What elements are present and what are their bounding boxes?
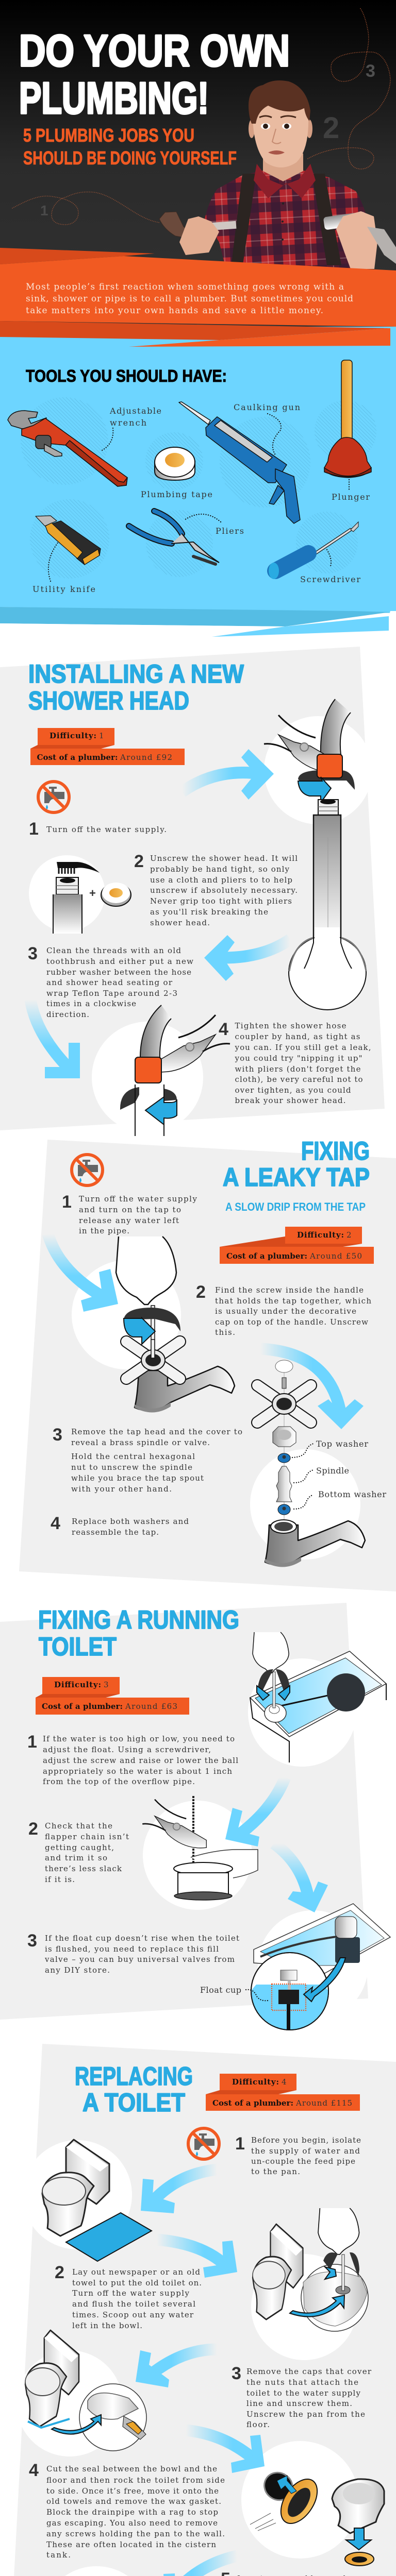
step 4: break your shower head. — [235, 1096, 345, 1105]
step 2: Check that the — [45, 1821, 112, 1831]
illustration: wax ring and bowl — [250, 2467, 384, 2566]
title: PLUMBING! — [19, 74, 209, 123]
step 1: un-couple the feed pipe — [251, 2157, 355, 2166]
step 2: probably be hand tight, so only — [150, 865, 290, 874]
step 4: tank. — [46, 2550, 71, 2560]
step 3: times in a clockwise — [46, 999, 136, 1008]
step 3: toilet to the water supply — [246, 2388, 361, 2398]
step 1 — [29, 819, 167, 839]
step 2 — [55, 2263, 202, 2330]
step 4: cloth), be very careful not to — [235, 1075, 363, 1084]
step 2: that holds the tap together, which — [215, 1296, 371, 1306]
illustration: hand with screwdriver on tap — [116, 1236, 235, 1413]
exploded tap labels: Spindle — [316, 1466, 349, 1476]
step 3: and shower head seating or — [46, 978, 173, 987]
step 2: use a cloth and pliers to to help — [150, 875, 292, 885]
badge: difficulty and cost: 3 — [104, 1680, 109, 1689]
white ovals — [143, 1658, 368, 2021]
badge: difficulty and cost: Cost of a plumber: — [42, 1702, 123, 1711]
arrow — [30, 999, 80, 1078]
step 3: 3 — [53, 1425, 62, 1445]
tool labels: Caulking gun — [234, 402, 300, 412]
illustration: flapper chain — [142, 1796, 258, 1900]
step 5 — [221, 2569, 371, 2576]
illustration: shower hose unscrew — [264, 699, 366, 1010]
panel: fixing a running toilet — [0, 1603, 390, 2030]
step 3: wrap Teflon Tape around 2-3 — [46, 989, 177, 998]
tool labels: Pliers — [216, 526, 244, 536]
step 3: direction. — [46, 1010, 89, 1019]
step 4: coupler by hand, as tight as — [235, 1032, 360, 1041]
icon: adjustable wrench — [8, 411, 127, 486]
badge: difficulty and cost: Difficulty: — [232, 2077, 279, 2087]
step 1: Turn off the water supply — [79, 1194, 197, 1204]
step 3: Remove the tap head and the cover to — [71, 1427, 242, 1436]
illustration: float adjustment in tank — [250, 1632, 386, 1762]
decorative dotted pipes with numerals: 3 — [366, 61, 375, 81]
badge: difficulty and cost: 4 — [282, 2077, 287, 2087]
tool leader lines — [48, 414, 349, 581]
illustration: cutting the seal — [25, 2330, 146, 2451]
step 1: appropriately so the water is about 1 inch — [43, 1767, 232, 1776]
icon: pliers — [129, 511, 219, 564]
decorative dotted pipes with numerals: 2 — [323, 111, 339, 145]
heading: INSTALLING A NEW — [28, 659, 244, 688]
step 1: adjust the screw and raise or lower the ball — [43, 1756, 238, 1765]
illustration: clean threads: + — [89, 887, 96, 900]
step 2: this. — [215, 1328, 235, 1337]
step 4: These are often located in the cistern — [46, 2540, 216, 2549]
badge: difficulty and cost — [36, 1677, 189, 1715]
step 4: 4 — [219, 1020, 228, 1039]
step 4 — [51, 1514, 189, 1537]
step 3: is flushed, you need to replace this fill — [45, 1944, 219, 1954]
step 4: over tighten, as you could — [235, 1086, 351, 1095]
step 2: 2 — [134, 852, 144, 871]
badge: difficulty and cost: Cost of a plumber: — [212, 2098, 293, 2108]
panel: installing a shower head — [0, 647, 385, 1136]
badge: difficulty and cost: Difficulty: — [50, 731, 96, 740]
step 3: line and unscrew them. — [246, 2399, 352, 2408]
step 3: valve – you can buy universal valves from — [44, 1955, 235, 1964]
subtitle — [23, 125, 237, 168]
icon: utility knife — [36, 516, 101, 565]
step 3: If the float cup doesn’t rise when the toilet — [45, 1934, 239, 1943]
step 1: the supply of water and — [251, 2146, 360, 2156]
step 3: the nuts that attach the — [246, 2378, 358, 2387]
step 2: is usually under the decorative — [215, 1307, 356, 1316]
step 2: left in the bowl. — [72, 2321, 142, 2330]
badge: difficulty and cost — [220, 1227, 374, 1264]
step 2 — [134, 852, 298, 927]
step 2: towel to put the old toilet on. — [72, 2278, 202, 2287]
step 3: rubber washer between the hose — [46, 968, 191, 977]
step 1: If the water is too high or low, you need to — [43, 1734, 235, 1743]
step 4: old towels and remove the wax gasket. — [46, 2497, 221, 2506]
step 1 — [62, 1192, 197, 1235]
heading: A LEAKY TAP — [223, 1163, 370, 1192]
step 4: to side. Once it’s free, move it onto the — [46, 2486, 219, 2496]
step 1: release any water left — [79, 1216, 179, 1225]
step 2: 2 — [55, 2263, 64, 2282]
icon: screwdriver — [269, 522, 358, 579]
badge: difficulty and cost — [30, 728, 185, 765]
step 2: times. Scoop out any water — [72, 2310, 194, 2319]
badge: difficulty and cost: Cost of a plumber: — [226, 1251, 307, 1261]
header background — [0, 0, 396, 330]
step 2: Lay out newspaper or an old — [72, 2267, 200, 2277]
arrow — [274, 1843, 328, 1912]
badge: difficulty and cost: Difficulty: — [297, 1230, 344, 1240]
step 4: floor and then rock the toilet from side — [46, 2476, 225, 2485]
step 1: Before you begin, isolate — [251, 2136, 361, 2145]
illustration: toilet and towel — [42, 2140, 152, 2261]
step 4: Tighten the shower hose — [235, 1021, 346, 1030]
illustration: tighten coupler — [120, 1005, 230, 1136]
orange ribbon and intro band — [0, 248, 396, 327]
step 2: Never grip too tight with pliers — [150, 896, 292, 906]
white ovals — [16, 2140, 380, 2576]
arrow — [225, 1777, 285, 1846]
heading: REPLACING — [75, 2062, 193, 2091]
hatch shadows — [21, 397, 376, 579]
icon: caulking gun — [179, 402, 300, 523]
badge: difficulty and cost: Around £115 — [295, 2098, 352, 2108]
exploded tap labels: Bottom washer — [318, 1489, 386, 1499]
step 3: Remove the caps that cover — [246, 2367, 372, 2376]
arrow — [157, 2240, 237, 2278]
icon: no water — [38, 782, 69, 812]
step 2: 2 — [196, 1282, 206, 1302]
step 2: Unscrew the shower head. It will — [150, 854, 298, 863]
intro text: Most people’s first reaction when something goes wrong with a — [26, 282, 344, 292]
step 3: any DIY store. — [45, 1965, 110, 1975]
step 4 — [219, 1020, 371, 1105]
badge: difficulty and cost: Around £50 — [309, 1251, 362, 1261]
step 3: Clean the threads with an old — [46, 946, 181, 955]
badge: difficulty and cost — [206, 2074, 360, 2111]
arrow — [136, 2349, 217, 2387]
step 2: and trim it so — [45, 1853, 107, 1862]
step 2 — [28, 1819, 129, 1884]
step 4 — [29, 2461, 225, 2560]
plumber photo — [159, 80, 396, 273]
step 3: 3 — [28, 944, 38, 963]
heading: FIXING A RUNNING — [38, 1605, 239, 1634]
step 3: toothbrush and either put a new — [46, 957, 193, 966]
intro text: take matters into your own hands and save a little money. — [26, 306, 323, 316]
step 4: any screws holding the pan to the wall. — [46, 2529, 225, 2538]
intro text — [26, 282, 353, 316]
tool labels: Plunger — [332, 492, 370, 502]
step 1: 1 — [62, 1192, 72, 1212]
step 3: while you brace the tap spout — [71, 1473, 204, 1483]
illustration: removing caps — [253, 2208, 368, 2331]
step 4: you can. If you still get a leak, — [234, 1043, 371, 1052]
decorative dotted pipes with numerals: 1 — [40, 202, 48, 218]
step 2: getting caught, — [45, 1843, 114, 1852]
label: float cup — [200, 1985, 268, 2001]
heading: FIXING — [301, 1137, 370, 1165]
panel: replacing a toilet — [0, 2044, 396, 2576]
step 1: 1 — [29, 819, 39, 839]
step 2: shower head. — [150, 918, 210, 927]
tool labels: Plumbing tape — [141, 489, 212, 499]
step 4: with pliers (don't forget the — [235, 1064, 361, 1074]
tool labels: Utility knife — [32, 584, 95, 594]
illustration: exploded tap — [257, 1360, 365, 1567]
step 2: if it is. — [45, 1875, 75, 1884]
step 3 — [232, 2364, 372, 2429]
tool labels: Screwdriver — [300, 574, 360, 584]
tool labels: wrench — [110, 418, 146, 428]
intro text: sink, shower or pipe is to call a plumber. But sometimes you could — [26, 294, 353, 304]
heading: A TOILET — [82, 2088, 185, 2117]
exploded tap labels: Top washer — [316, 1439, 368, 1449]
exploded tap labels — [292, 1439, 386, 1509]
badge: difficulty and cost: Around £63 — [125, 1702, 177, 1711]
arrow — [48, 1234, 118, 1312]
heading: TOILET — [39, 1632, 117, 1661]
step 1: 1 — [235, 2134, 245, 2154]
title — [19, 26, 290, 123]
icon: plumbing tape — [155, 447, 195, 480]
step 2: there’s less slack — [45, 1864, 122, 1873]
step 1 — [27, 1732, 238, 1786]
step 2: Turn off the water supply — [72, 2289, 190, 2298]
step 2: cap on top of the handle. Unscrew — [215, 1317, 368, 1327]
badge: difficulty and cost: Cost of a plumber: — [37, 753, 118, 762]
step 3: 3 — [232, 2364, 241, 2383]
step 4: you could try "nipping it up" — [234, 1054, 362, 1063]
arrow — [186, 2430, 265, 2473]
icon: no water — [188, 2128, 219, 2159]
step 1: in the pipe. — [79, 1226, 129, 1235]
heading — [38, 1605, 239, 1661]
step 1 — [235, 2134, 361, 2176]
heading — [75, 2062, 193, 2117]
step 3: 3 — [27, 1931, 37, 1951]
step 4: 4 — [51, 1514, 60, 1533]
label: float cup: Float cup — [200, 1985, 241, 1995]
step 3: floor. — [246, 2420, 270, 2429]
step 2: as you'll risk breaking the — [150, 907, 268, 917]
arrow — [204, 935, 290, 981]
tool labels — [32, 402, 370, 594]
step 3 — [28, 944, 193, 1019]
arrow — [182, 749, 274, 800]
step 1: and turn on the tap to — [79, 1205, 181, 1214]
icon: no water — [72, 1155, 103, 1185]
panel: tools — [0, 321, 396, 639]
step 1: from the top of the overflow pipe. — [43, 1777, 195, 1786]
step 3: nut to unscrew the spindle — [71, 1463, 192, 1472]
subtitle: 5 PLUMBING JOBS YOU — [23, 125, 194, 146]
step 2: and flush the toilet several — [72, 2299, 195, 2309]
heading — [28, 659, 244, 715]
step 1: to the pan. — [251, 2167, 300, 2176]
step 4: Replace both washers and — [72, 1517, 189, 1526]
step 3 — [53, 1425, 242, 1494]
step 4: 4 — [29, 2461, 39, 2480]
step 3: reveal a brass spindle or valve. — [71, 1438, 210, 1447]
badge: difficulty and cost: 1 — [99, 731, 104, 740]
heading — [223, 1137, 370, 1213]
step 1: Turn off the water supply. — [46, 825, 167, 834]
step 2 — [196, 1282, 371, 1337]
panel: fixing a leaky tap — [19, 1137, 396, 1591]
step 3: Unscrew the pan from the — [246, 2410, 365, 2419]
step 4: reassemble the tap. — [72, 1528, 159, 1537]
step 3: Hold the central hexagonal — [71, 1452, 195, 1461]
title: DO YOUR OWN — [19, 26, 290, 76]
badge: difficulty and cost: 2 — [346, 1230, 352, 1240]
white ovals — [72, 1260, 360, 1560]
step 1: 1 — [27, 1732, 37, 1752]
step 4: gas escaping. You also need to remove — [46, 2518, 218, 2528]
tool labels: Adjustable — [109, 406, 161, 416]
tools heading: TOOLS YOU SHOULD HAVE: — [26, 366, 227, 385]
step 3: with your other hand. — [71, 1484, 172, 1494]
step 1: adjust the float. Using a screwdriver, — [43, 1745, 211, 1754]
subtitle: SHOULD BE DOING YOURSELF — [23, 147, 237, 168]
icon: plunger — [324, 360, 371, 478]
step 4: Block the drainpipe with a rag to stop — [46, 2507, 218, 2517]
step 3 — [27, 1931, 239, 1975]
step 2: flapper chain isn’t — [45, 1832, 129, 1841]
step 2: 2 — [28, 1819, 38, 1839]
arrow — [141, 2170, 217, 2213]
white ovals — [29, 716, 372, 1133]
badge: difficulty and cost: Around £92 — [120, 753, 172, 762]
heading: SHOWER HEAD — [28, 686, 189, 715]
illustration: clean threads — [53, 862, 131, 934]
step 2: Find the screw inside the handle — [215, 1285, 364, 1295]
arrow — [260, 1349, 364, 1429]
badge: difficulty and cost: Difficulty: — [54, 1680, 101, 1689]
decorative dotted pipes with numerals — [12, 8, 390, 225]
step 2: unscrew if absolutely necessary. — [150, 886, 298, 895]
heading: A SLOW DRIP FROM THE TAP — [225, 1200, 366, 1213]
arrow — [163, 2556, 237, 2576]
step 4: Cut the seal between the bowl and the — [46, 2464, 217, 2473]
illustration: float cup detail — [251, 1904, 390, 2030]
